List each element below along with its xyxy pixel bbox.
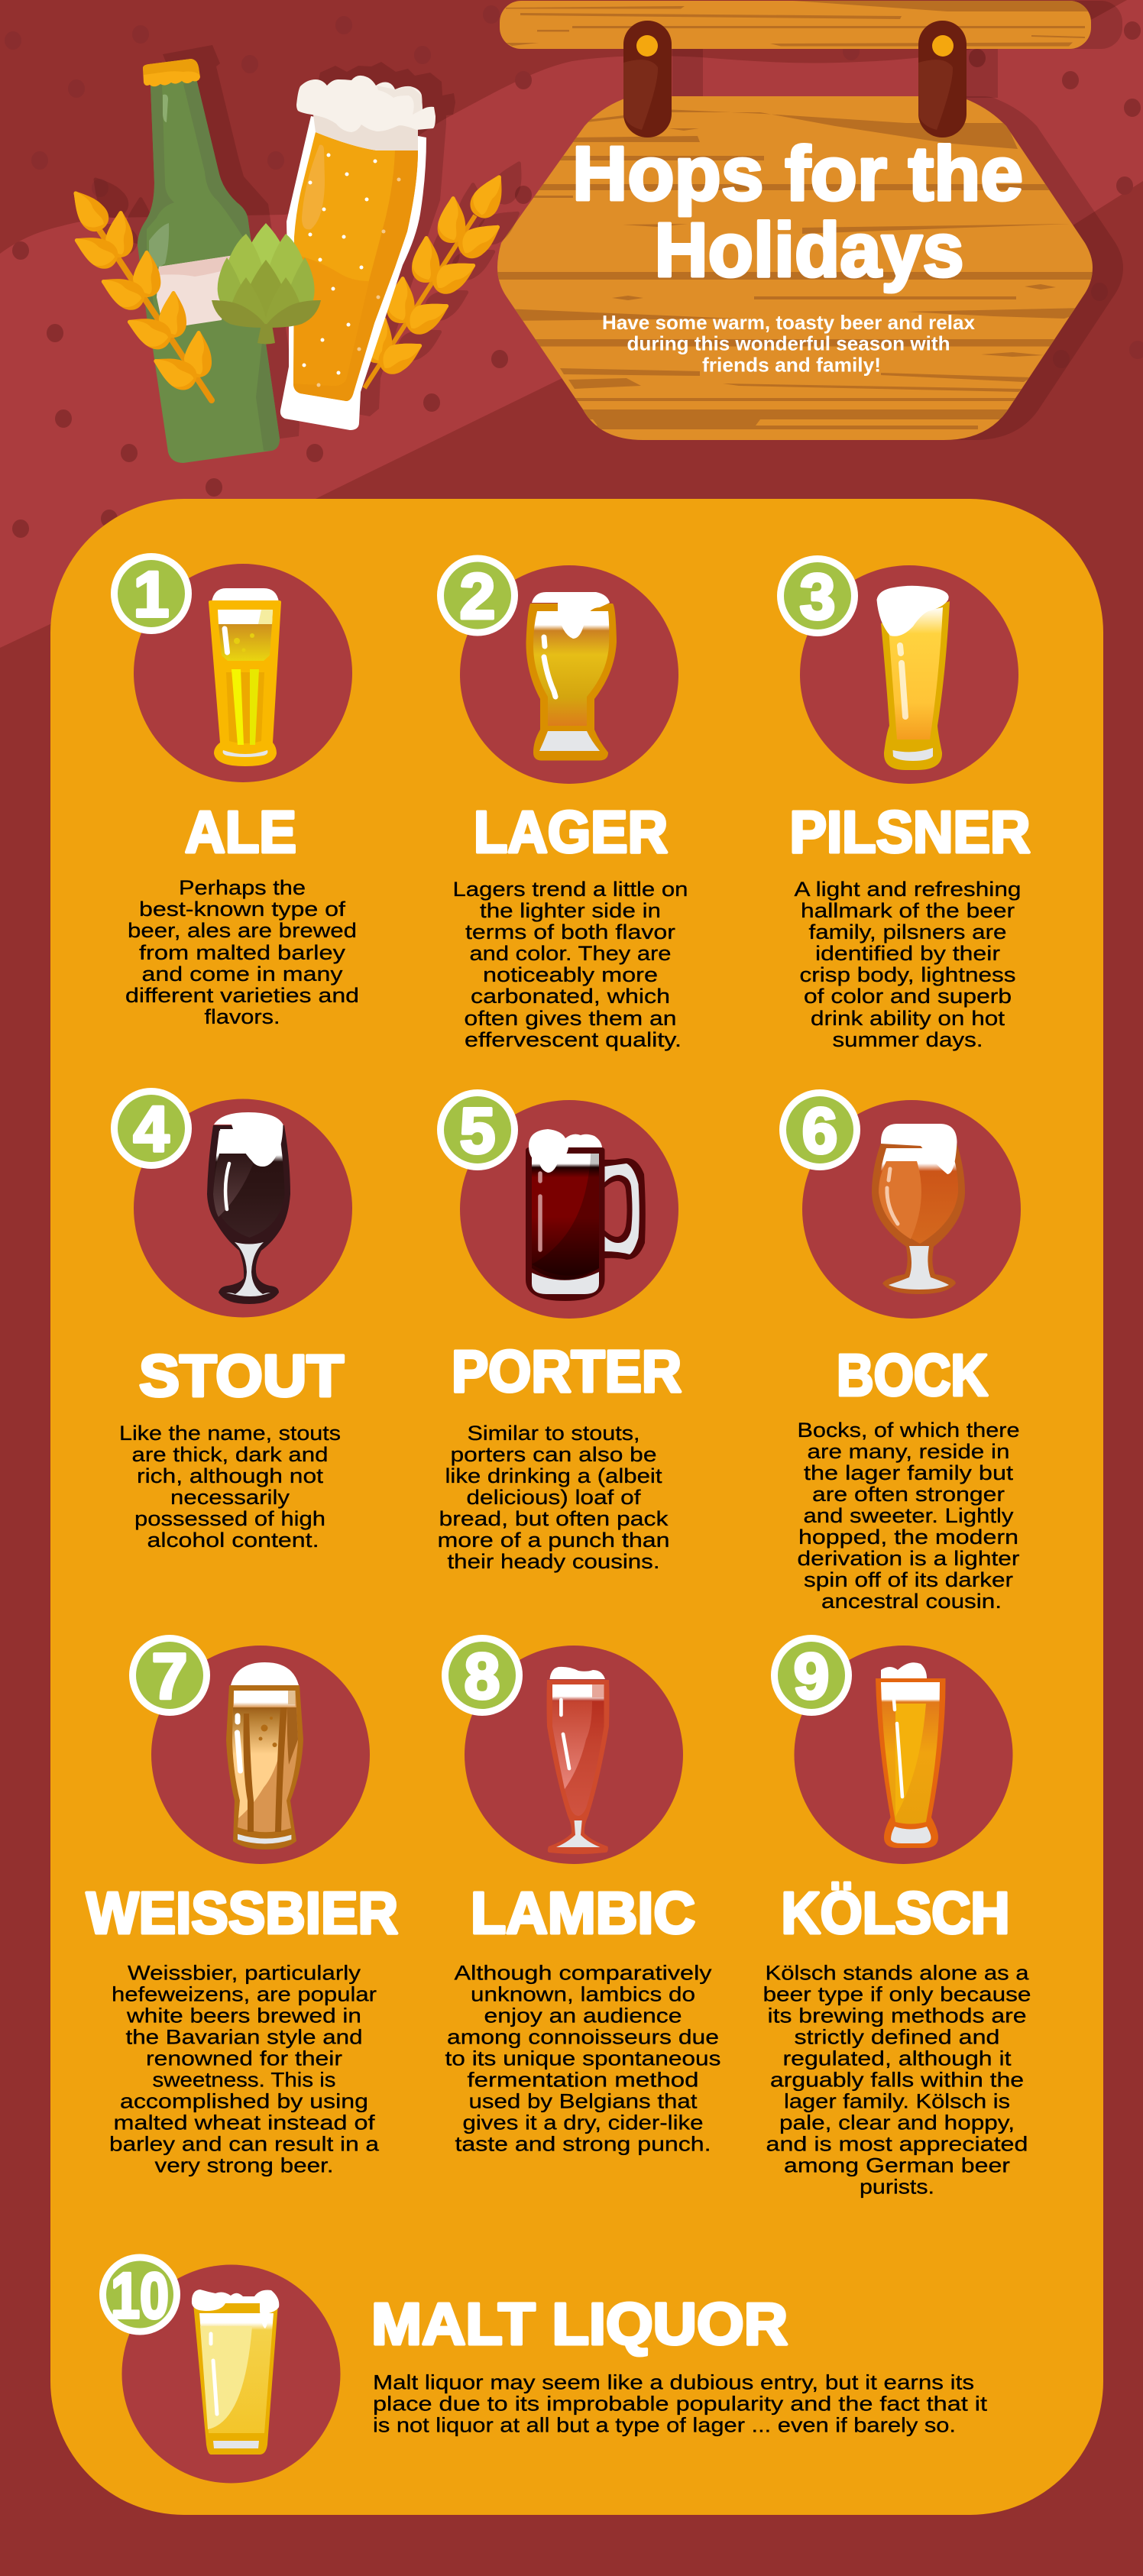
- hop cone: [212, 223, 321, 344]
- description: enjoy an audience: [484, 2005, 682, 2027]
- description: [452, 878, 688, 1051]
- description: bread, but often pack: [439, 1507, 669, 1530]
- item 8: lambic: [442, 1635, 721, 2156]
- description: white beers brewed in: [126, 2005, 361, 2027]
- description: crisp body, lightness: [799, 963, 1016, 986]
- subtitle: Have some warm, toasty beer and relax: [602, 311, 976, 334]
- description: taste and strong punch.: [455, 2133, 711, 2156]
- description: barley and can result in a: [109, 2133, 380, 2156]
- description: Similar to stouts,: [468, 1422, 640, 1445]
- description: purists.: [860, 2176, 934, 2199]
- description: Malt liquor may seem like a dubious entry, but it earns its: [373, 2371, 974, 2394]
- description: is not liquor at all but a type of lager ... even if barely so.: [373, 2414, 956, 2437]
- description: are thick, dark and: [131, 1443, 329, 1466]
- description: derivation is a lighter: [798, 1547, 1019, 1570]
- description: renowned for their: [146, 2047, 342, 2070]
- description: lager family. Kölsch is: [784, 2090, 1010, 2113]
- description: hopped, the modern: [798, 1526, 1018, 1549]
- description: [437, 1422, 669, 1573]
- title: Holidays: [654, 208, 964, 293]
- description: porters can also be: [451, 1443, 657, 1466]
- subtitle: [602, 311, 976, 376]
- beer glass: [280, 76, 436, 430]
- circle and porter mug icon: [437, 1089, 678, 1319]
- description: summer days.: [833, 1028, 983, 1051]
- heading: LAMBIC: [471, 1881, 695, 1947]
- description: possessed of high: [134, 1507, 325, 1530]
- circle and bock glass icon: 6: [802, 1095, 837, 1167]
- description: [125, 876, 359, 1028]
- description: their heady cousins.: [448, 1550, 660, 1573]
- description: Lagers trend a little on: [452, 878, 688, 901]
- circle and stout glass icon: [111, 1088, 352, 1317]
- description: best-known type of: [139, 898, 346, 921]
- circle and ale glass icon: 1: [134, 558, 169, 630]
- description: drink ability on hot: [811, 1007, 1005, 1030]
- circle and malt liquor glass icon: 10: [111, 2260, 169, 2332]
- description: Like the name, stouts: [119, 1422, 341, 1445]
- description: pale, clear and hoppy,: [779, 2112, 1015, 2134]
- description: and come in many: [142, 963, 343, 985]
- description: terms of both flavor: [465, 921, 675, 943]
- description: hallmark of the beer: [801, 899, 1015, 922]
- description: Weissbier, particularly: [128, 1962, 361, 1985]
- description: [445, 1962, 721, 2156]
- heading: WEISSBIER: [86, 1881, 398, 1947]
- description: family, pilsners are: [808, 921, 1007, 943]
- description: [373, 2371, 988, 2437]
- description: delicious) loaf of: [466, 1486, 641, 1509]
- description: used by Belgians that: [469, 2090, 698, 2113]
- title: [572, 131, 1023, 293]
- item 2: lager: [437, 555, 688, 1051]
- description: among connoisseurs due: [447, 2026, 719, 2049]
- description: beer type if only because: [763, 1983, 1031, 2006]
- description: effervescent quality.: [465, 1028, 682, 1051]
- description: are many, reside in: [807, 1440, 1010, 1463]
- description: among German beer: [784, 2154, 1010, 2177]
- illustration: bottle, beer glass, wheat and hop: [63, 45, 533, 463]
- description: Although comparatively: [454, 1962, 712, 1985]
- description: very strong beer.: [154, 2154, 333, 2177]
- description: sweetness. This is: [153, 2069, 336, 2092]
- description: alcohol content.: [147, 1529, 319, 1552]
- circle and lager glass icon: 2: [460, 561, 495, 633]
- description: [763, 1962, 1031, 2199]
- description: identified by their: [815, 942, 1000, 965]
- description: necessarily: [170, 1486, 290, 1509]
- heading: PORTER: [452, 1338, 682, 1404]
- description: hefeweizens, are popular: [112, 1983, 377, 2006]
- circle and weissbier glass icon: [129, 1635, 370, 1864]
- item 1: ale: [111, 553, 359, 1028]
- circle and malt liquor glass icon: [99, 2254, 341, 2483]
- heading: KÖLSCH: [781, 1881, 1010, 1947]
- description: unknown, lambics do: [471, 1983, 695, 2006]
- description: [798, 1419, 1019, 1613]
- item 7: weissbier: [86, 1635, 398, 2177]
- circle and lambic glass icon: [442, 1635, 683, 1864]
- right wheat sprig: [361, 169, 513, 388]
- description: accomplished by using: [120, 2090, 368, 2113]
- description: are often stronger: [812, 1483, 1005, 1506]
- item 3: pilsner: [777, 555, 1030, 1051]
- heading: ALE: [185, 799, 296, 865]
- green bottle: [138, 59, 280, 463]
- description: and is most appreciated: [766, 2133, 1028, 2156]
- circle and stout glass icon: 4: [134, 1093, 170, 1165]
- description: place due to its improbable popularity and the fact that it: [373, 2393, 988, 2416]
- description: often gives them an: [465, 1007, 677, 1030]
- main content panel: [50, 499, 1103, 2515]
- item 4: stout: [111, 1088, 352, 1552]
- circle and ale glass icon: [111, 553, 352, 782]
- description: Kölsch stands alone as a: [766, 1962, 1030, 1985]
- circle and pilsner glass icon: [777, 555, 1018, 784]
- description: spin off of its darker: [804, 1568, 1013, 1591]
- circle and porter mug icon: 5: [460, 1095, 495, 1167]
- circle and weissbier glass icon: 7: [152, 1640, 187, 1712]
- description: Perhaps the: [179, 876, 306, 899]
- item 9: kolsch: [763, 1635, 1031, 2199]
- circle and lambic glass icon: 8: [465, 1640, 500, 1712]
- description: strictly defined and: [795, 2026, 999, 2049]
- circle and pilsner glass icon: 3: [800, 561, 835, 633]
- circle and kolsch glass icon: [771, 1635, 1013, 1864]
- description: gives it a dry, cider-like: [463, 2112, 703, 2134]
- description: fermentation method: [468, 2069, 698, 2092]
- left wheat sprig: [63, 183, 212, 400]
- description: Bocks, of which there: [798, 1419, 1019, 1442]
- heading: PILSNER: [790, 799, 1030, 865]
- description: regulated, although it: [782, 2047, 1012, 2070]
- description: more of a punch than: [437, 1529, 669, 1552]
- heading: STOUT: [139, 1343, 344, 1409]
- description: of color and superb: [804, 985, 1012, 1008]
- item 10: malt liquor: [99, 2254, 988, 2483]
- description: its brewing methods are: [767, 2005, 1027, 2027]
- description: the lighter side in: [480, 899, 661, 922]
- description: to its unique spontaneous: [445, 2047, 721, 2070]
- circle and lager glass icon: [437, 555, 678, 784]
- description: [119, 1422, 341, 1552]
- heading: MALT LIQUOR: [371, 2292, 788, 2358]
- description: different varieties and: [125, 984, 359, 1007]
- description: malted wheat instead of: [113, 2112, 375, 2134]
- circle and kolsch glass icon: 9: [794, 1640, 829, 1712]
- description: from malted barley: [139, 941, 346, 964]
- description: [109, 1962, 380, 2177]
- subtitle: during this wonderful season with: [627, 332, 950, 354]
- hanging wooden sign: [489, 1, 1123, 440]
- description: beer, ales are brewed: [128, 919, 357, 942]
- description: ancestral cousin.: [821, 1590, 1002, 1613]
- description: A light and refreshing: [795, 878, 1021, 901]
- description: arguably falls within the: [770, 2069, 1024, 2092]
- heading: BOCK: [837, 1343, 988, 1409]
- description: and color. They are: [469, 942, 671, 965]
- heading: LAGER: [474, 799, 668, 865]
- description: rich, although not: [137, 1464, 324, 1487]
- subtitle: friends and family!: [702, 353, 881, 376]
- item 5: porter: [437, 1089, 682, 1573]
- description: and sweeter. Lightly: [804, 1504, 1014, 1527]
- description: flavors.: [205, 1005, 280, 1028]
- item 6: bock: [779, 1089, 1021, 1613]
- description: noticeably more: [483, 963, 658, 986]
- description: carbonated, which: [471, 985, 670, 1008]
- circle and bock glass icon: [779, 1089, 1021, 1319]
- description: the Bavarian style and: [125, 2026, 362, 2049]
- description: the lager family but: [804, 1461, 1014, 1484]
- description: [795, 878, 1021, 1051]
- title: Hops for the: [572, 131, 1023, 217]
- description: like drinking a (albeit: [445, 1464, 662, 1487]
